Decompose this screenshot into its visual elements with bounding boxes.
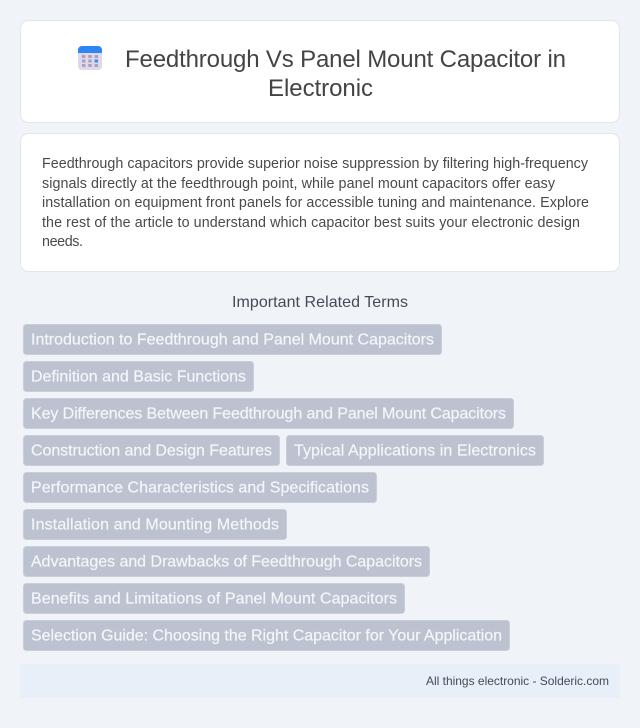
tag: introduction: Introduction to Feedthrough and Panel Mount Capacitors: [31, 332, 434, 348]
text block: introduction paragraph: the rest of the article to understand which capacitor best suits your electronic design: [42, 215, 580, 231]
text block: introduction paragraph: installation on equipment front panels for accessible tuning and maintenance. Explore: [42, 195, 589, 211]
tag: advantages: Advantages and Drawbacks of Feedthrough Capacitors: [31, 554, 422, 570]
tag: performance: [24, 472, 376, 502]
text block: introduction paragraph: needs.: [42, 234, 83, 250]
tag: installation: [24, 510, 286, 540]
tag: introduction: [24, 324, 442, 354]
panel: introduction: [20, 134, 620, 272]
tag: definition: Definition and Basic Functions: [31, 368, 246, 386]
icon: calendar: [78, 46, 102, 70]
tag: performance: Performance Characteristics and Specifications: [31, 480, 369, 496]
tag: selection guide: [24, 620, 510, 650]
tag: typical applications: [286, 436, 544, 466]
tag: key differences: Key Differences Between Feedthrough and Panel Mount Capacitors: [31, 406, 506, 422]
tag: advantages: [24, 546, 430, 576]
title: [125, 46, 566, 102]
tag: construction: [24, 436, 280, 466]
tag: definition: [24, 362, 254, 392]
tag: construction: Construction and Design Features: [31, 442, 272, 460]
footer: All things electronic - Solderic.com: [426, 674, 609, 688]
title: Electronic: [268, 75, 373, 102]
tag: benefits: Benefits and Limitations of Panel Mount Capacitors: [31, 590, 397, 608]
tag: typical applications: Typical Applications in Electronics: [294, 442, 536, 460]
text block: introduction paragraph: [42, 156, 589, 250]
tag: key differences: [24, 398, 514, 428]
tag: installation: Installation and Mounting Methods: [31, 516, 279, 534]
title: Feedthrough Vs Panel Mount Capacitor in: [125, 46, 566, 73]
heading: important related terms: Important Related Terms: [232, 294, 408, 311]
tag: benefits: [24, 584, 404, 614]
tag: selection guide: Selection Guide: Choosing the Right Capacitor for Your Application: [31, 628, 502, 644]
panel: title card: [20, 20, 620, 122]
footer: [20, 664, 620, 698]
text block: introduction paragraph: signals directly at the feedthrough point, while panel mount capacitors offer easy: [42, 176, 556, 192]
text block: introduction paragraph: Feedthrough capacitors provide superior noise suppression by filtering high-frequency: [42, 156, 589, 172]
